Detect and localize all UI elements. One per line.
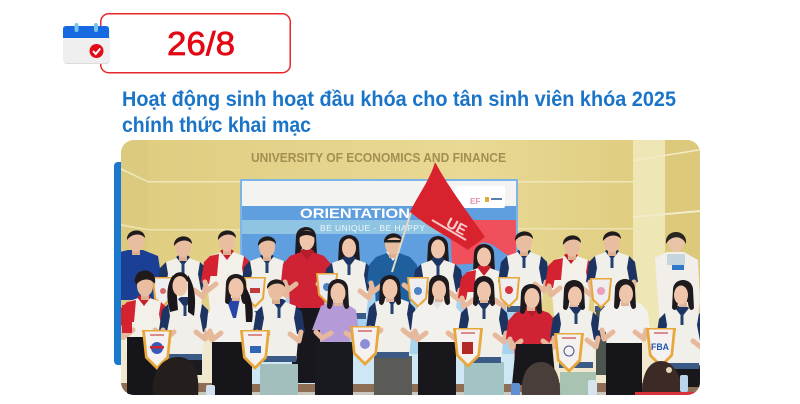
icon: calendar with check mark: [63, 23, 110, 64]
red flag with UEF logo: UE: [443, 215, 470, 239]
projection screen: [240, 179, 518, 384]
photo: students at orientation opening: [118, 140, 708, 397]
back row of students: [120, 227, 700, 383]
screen title: BE UNIQUE - BE HAPPY: [320, 223, 425, 233]
front row pennants: FBA: [651, 342, 669, 353]
heading: chính thức khai mạc: [122, 114, 311, 137]
date box: [101, 14, 290, 73]
projection screen: EF: [470, 197, 480, 206]
date text: 26/8: [167, 25, 235, 62]
front row pennants: [142, 326, 676, 373]
floor and stage: [121, 340, 700, 396]
red flag with UEF logo: [392, 162, 485, 272]
back row pennants: [152, 273, 612, 309]
heading: [122, 88, 676, 137]
screen title: [300, 208, 425, 232]
audience heads and water bottles: [153, 357, 695, 397]
screen title: ORIENTATION: [300, 205, 410, 221]
heading: Hoạt động sinh hoạt đầu khóa cho tân sinh viên khóa 2025: [122, 88, 676, 111]
wall background: [121, 140, 700, 395]
wall lettering: UNIVERSITY OF ECONOMICS AND FINANCE: [251, 151, 506, 165]
front row of students: [118, 270, 708, 397]
blue accent bar: [114, 162, 126, 365]
